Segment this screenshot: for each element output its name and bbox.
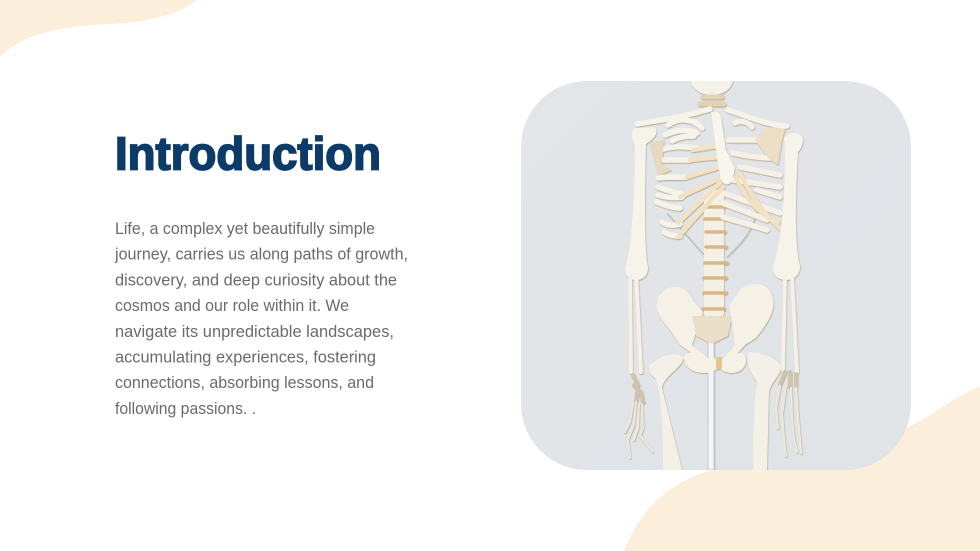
body text: discovery, and deep curiosity about the [115, 270, 397, 289]
body text: journey, carries us along paths of growth, [114, 245, 408, 264]
skull base [690, 81, 734, 94]
body text: accumulating experiences, fostering [115, 348, 376, 366]
pelvis [657, 284, 774, 373]
body text [114, 219, 408, 418]
neck [700, 97, 724, 104]
body text: connections, absorbing lessons, and [115, 373, 374, 392]
photo: skeleton model [521, 78, 911, 470]
left arm [625, 127, 657, 458]
costal cartilage [678, 146, 782, 237]
right arm [773, 133, 803, 456]
left femur [649, 354, 684, 470]
stand [708, 340, 714, 470]
body text: Life, a complex yet beautifully simple [115, 219, 375, 238]
right femur [747, 352, 781, 470]
spine [703, 190, 727, 318]
scapula [755, 126, 786, 165]
background blob: top left [0, 0, 197, 57]
background blob: bottom right [624, 386, 980, 551]
ribs: left [657, 120, 702, 236]
body text: cosmos and our role within it. We [115, 296, 349, 315]
wires [667, 207, 757, 257]
title: Introduction [115, 128, 381, 180]
clavicles [637, 109, 787, 126]
ribs: right [723, 122, 780, 230]
body text: following passions. . [115, 399, 256, 418]
sternum [711, 112, 735, 185]
body text: navigate its unpredictable landscapes, [115, 322, 394, 341]
